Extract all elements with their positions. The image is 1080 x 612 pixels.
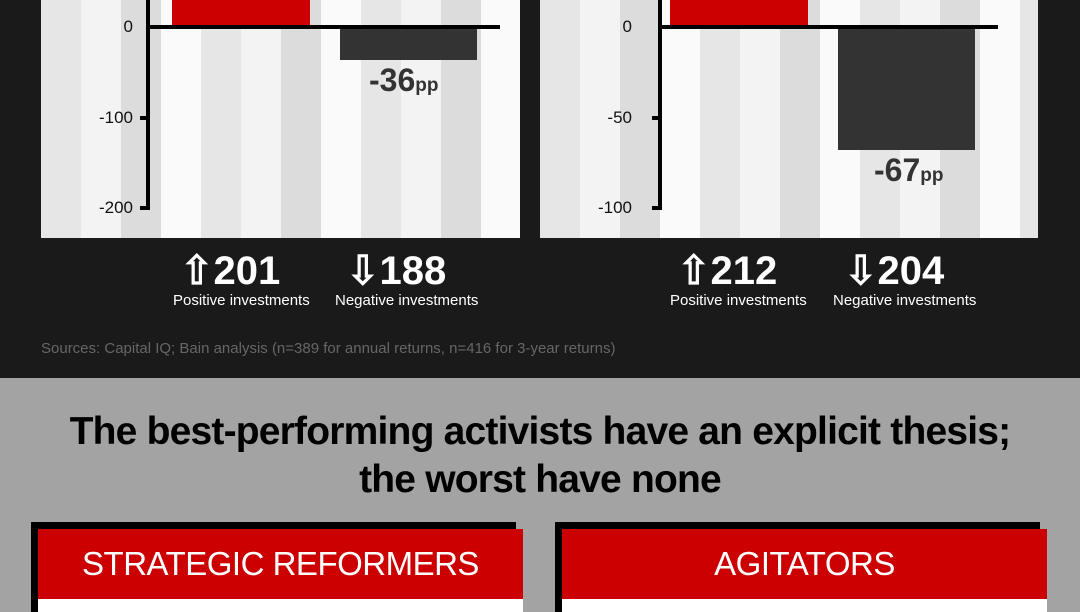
stat: 212 positive: ⇧212 — [677, 249, 777, 293]
dark bar — [340, 29, 477, 60]
axes — [146, 0, 150, 210]
stat: 201 positive: Positive investments — [173, 292, 310, 309]
grey section — [0, 378, 1080, 612]
stat: 204 negative: ⇩204 — [844, 249, 944, 293]
panel: 3-year returns chart: -100 — [598, 198, 632, 217]
stat: 204 negative — [833, 249, 976, 309]
stat: 188 negative: ⇩188 — [346, 249, 446, 293]
card: strategic reformers: STRATEGIC REFORMERS — [82, 545, 479, 582]
panel: annual returns chart: -200 — [99, 198, 133, 217]
panel: annual returns chart: -100 — [99, 108, 133, 127]
stat: 201 positive: ⇧201 — [180, 249, 280, 293]
label -36pp: -36pp — [369, 62, 438, 98]
stat: 212 positive: Positive investments — [670, 292, 807, 309]
stat: 201 positive — [173, 249, 310, 309]
title: the worst have none — [359, 458, 721, 501]
card: agitators: AGITATORS — [714, 545, 895, 582]
stat: 212 positive — [670, 249, 807, 309]
stat: 188 negative: Negative investments — [335, 292, 478, 309]
panel: 3-year returns chart: -50 — [607, 108, 632, 127]
title — [70, 410, 1010, 501]
dark bar — [838, 29, 975, 150]
label -67pp: -67pp — [874, 152, 943, 188]
red bar — [670, 0, 808, 27]
title: The best-performing activists have an explicit thesis; — [70, 410, 1010, 453]
stat: 188 negative — [335, 249, 478, 309]
panel: annual returns chart — [41, 0, 520, 238]
panel: 3-year returns chart — [540, 0, 1038, 238]
card: strategic reformers — [31, 522, 523, 612]
stat: 204 negative: Negative investments — [833, 292, 976, 309]
panel: annual returns chart: 0 — [124, 17, 133, 36]
card: agitators — [555, 522, 1047, 612]
sources: Sources: Capital IQ; Bain analysis (n=389 for annual returns, n=416 for 3-year returns) — [41, 340, 615, 357]
red bar — [172, 0, 310, 27]
panel: 3-year returns chart: 0 — [623, 17, 632, 36]
